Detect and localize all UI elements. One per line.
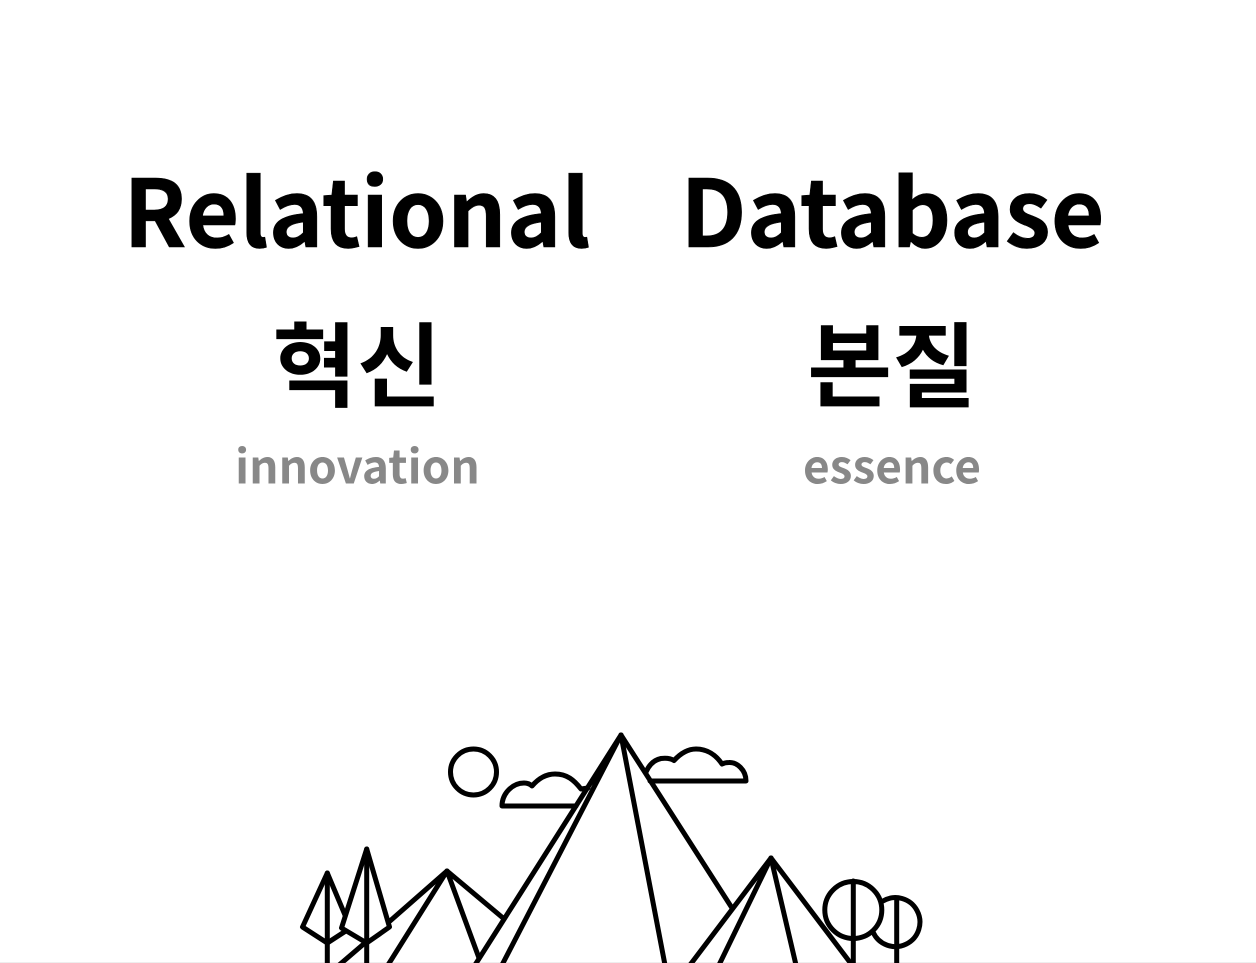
illustration: mountain landscape bbox=[302, 735, 920, 963]
icon: central mountain bbox=[475, 735, 732, 963]
title: Relational: Relational bbox=[123, 139, 591, 274]
icon: right hill bbox=[690, 858, 852, 963]
title: Database: Database bbox=[680, 139, 1105, 274]
icon: round tree small bbox=[873, 898, 920, 963]
heading: 본질: 본질 bbox=[807, 294, 977, 426]
subheading: essence: essence bbox=[803, 432, 981, 498]
icon: pine tree tall bbox=[342, 849, 390, 963]
subheading: innovation: innovation bbox=[235, 432, 480, 498]
icon: right cloud bbox=[646, 749, 746, 781]
icon: pine tree small bbox=[302, 873, 345, 963]
icon: left cloud bbox=[502, 774, 588, 806]
icon: round tree large bbox=[825, 881, 882, 963]
icon: left hill bbox=[338, 871, 503, 963]
heading: 혁신: 혁신 bbox=[272, 294, 442, 426]
icon: sun bbox=[450, 749, 496, 795]
